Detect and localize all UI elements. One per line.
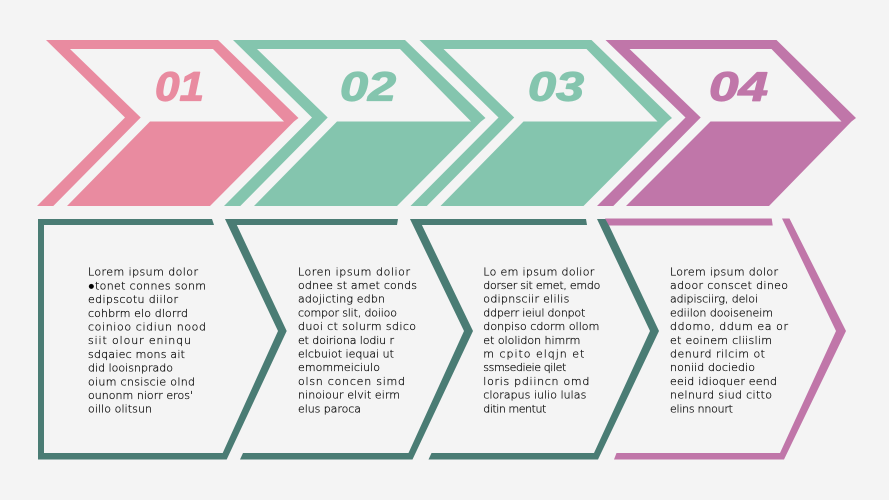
body text — [670, 265, 788, 415]
body text: did looisnprado — [88, 362, 173, 375]
body text: elcbuiot iequai ut — [298, 348, 394, 360]
body text: odnee st amet conds — [298, 279, 417, 292]
body text: nelnurd siud citto — [670, 389, 772, 402]
body text: adojicting edbn — [298, 293, 385, 306]
panel: step 02 text box — [225, 219, 473, 460]
body text: edipscotu diilor — [88, 293, 178, 306]
body text: Lo em ipsum dolior — [483, 265, 595, 278]
body text: et doiriona lodiu r — [298, 334, 394, 347]
number 03: 03 — [528, 64, 584, 110]
body text: loris pdiincn omd — [483, 375, 589, 388]
body text: et eoinem cliislim — [670, 334, 772, 347]
body text: oillo olitsun — [88, 403, 152, 416]
body text: Loren ipsum dolior — [298, 265, 410, 278]
filled lower block — [67, 122, 294, 206]
body text: duoi ct solurm sdico — [298, 320, 416, 333]
filled lower block — [254, 122, 481, 206]
body text: adoor conscet dineo — [670, 279, 788, 292]
body text: siit olour eninqu — [88, 334, 191, 347]
body text: ounonm niorr eros' — [88, 389, 193, 402]
filled lower block — [440, 122, 668, 206]
chevron outline — [410, 40, 672, 206]
chevron outline — [37, 40, 298, 206]
panel: step 03 text box — [410, 219, 659, 460]
panel: step 01 text box — [38, 219, 287, 460]
box outline — [605, 218, 846, 460]
body text: oium cnsiscie olnd — [88, 375, 195, 388]
body text: dorser sit emet, emdo — [483, 279, 600, 292]
body text: compor slit, doiioo — [298, 306, 397, 319]
number 02: 02 — [340, 64, 396, 110]
body text: ●tonet connes sonm — [88, 279, 206, 292]
body text: ssmsedieie qilet — [483, 361, 566, 374]
filled lower block — [626, 122, 852, 206]
body text — [298, 265, 417, 415]
panel: step 01 chevron header — [37, 40, 298, 206]
body text — [483, 265, 600, 415]
panel: step 04 chevron header — [597, 40, 856, 206]
body text: et ololidon himrm — [483, 334, 580, 347]
body text: olsn concen simd — [298, 375, 405, 388]
body text: cohbrm elo dlorrd — [88, 307, 188, 320]
body text: donpiso cdorm ollom — [483, 320, 599, 333]
chevron outline — [597, 40, 856, 206]
body text: odipnsciir elilis — [483, 293, 569, 306]
body text: clorapus iulio lulas — [483, 389, 586, 402]
body text: ditin rnentut — [483, 402, 546, 415]
body text — [88, 266, 206, 416]
number 01: 01 — [155, 64, 204, 110]
body text: ninoiour elvit eirm — [298, 389, 400, 402]
panel: step 03 chevron header — [410, 40, 672, 206]
box outline — [38, 219, 287, 460]
body text: adipisciirg, deloi — [670, 293, 758, 306]
body text: noniid dociedio — [670, 361, 755, 374]
panel: step 02 chevron header — [224, 40, 486, 206]
panel: step 04 text box — [605, 218, 846, 460]
body text: sdqaiec mons ait — [88, 348, 185, 361]
body text: ediilon dooiseneim — [670, 306, 773, 319]
box outline — [225, 219, 473, 460]
body text: Lorem ipsum dolor — [88, 266, 198, 279]
body text: ddomo, ddum ea or — [670, 320, 788, 333]
body text: m cpito elqjn et — [483, 348, 584, 360]
box outline — [410, 219, 659, 460]
body text: elins nnourt — [670, 402, 733, 415]
body text: Lorem ipsum dolor — [670, 265, 778, 278]
chevron outline — [224, 40, 486, 206]
body text: ddperr ieiul donpot — [483, 306, 585, 319]
body text: coinioo cidiun nood — [88, 320, 206, 334]
body text: emommeiciulo — [298, 361, 380, 374]
body text: eeid idioquer eend — [670, 375, 777, 388]
body text: denurd rilcim ot — [670, 348, 765, 360]
body text: elus paroca — [298, 402, 361, 415]
number 04: 04 — [709, 64, 768, 110]
